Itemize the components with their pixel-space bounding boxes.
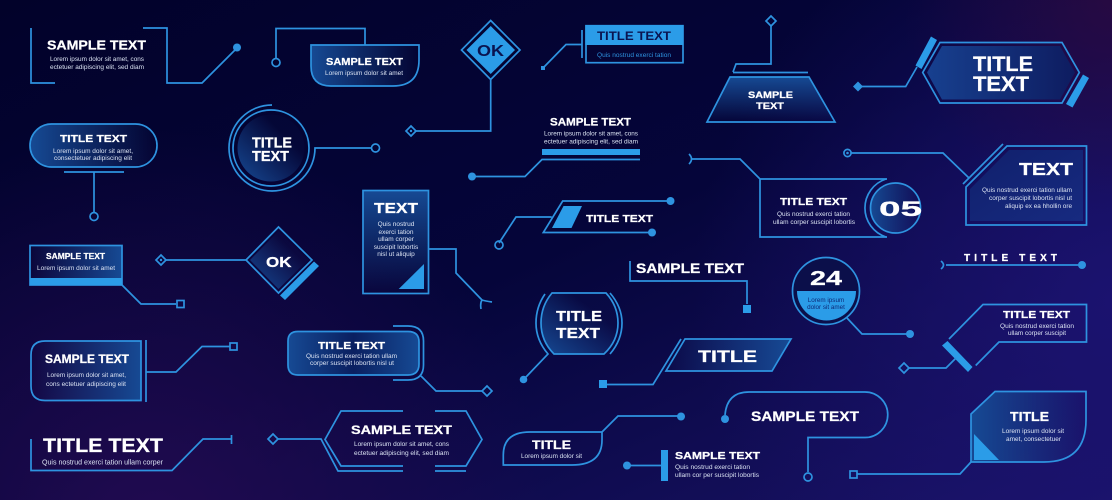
callout: title text clipped circle: TEXT <box>556 325 600 342</box>
callout: sample text rounded outline: SAMPLE TEXT <box>751 409 860 424</box>
callout: title text rounded rectangle <box>288 326 492 396</box>
callout: title text angled arm <box>899 304 1086 373</box>
callout: sample text with underline bar: Lorem ipsum dolor sit amet, cons <box>544 130 639 138</box>
callout: 24 circle badge <box>792 258 914 338</box>
callout: 24 circle badge: Lorem ipsum <box>808 297 844 304</box>
callout: title panel with triangle <box>850 392 1086 478</box>
callout: title small rounded box: Lorem ipsum dolor sit <box>521 453 582 460</box>
callout: title panel with triangle: Lorem ipsum dolor sit <box>1002 428 1064 435</box>
callout: title text parallelogram tag <box>495 197 674 249</box>
callout: title text rounded rectangle: TITLE TEXT <box>318 340 386 352</box>
callout: sample text left rounded panel <box>31 340 237 402</box>
callout: text panel with cut corner <box>844 144 1086 225</box>
callout: title text rounded rectangle: corper suscipit lobortis nisl ut <box>310 360 394 367</box>
callout: spaced title text line: TITLE TEXT <box>964 253 1057 264</box>
callout: title parallelogram: TITLE <box>698 348 757 366</box>
callout: title text clipped circle: TITLE <box>556 308 602 325</box>
callout: large title text bracket: Quis nostrud exerci tation ullam corper <box>42 460 164 466</box>
callout: sample text broken hexagon: ectetuer adipiscing elit, sed diam <box>354 450 449 457</box>
callout: sample text with underline bar: SAMPLE TEXT <box>550 116 631 128</box>
callout: sample text broken hexagon <box>268 411 482 471</box>
callout: tall text card: exerci tation <box>378 229 414 236</box>
callout: sample text box with blue base: Lorem ipsum dolor sit amet <box>37 265 115 272</box>
callout: numbered 05 panel <box>689 154 923 237</box>
callout: title parallelogram <box>599 339 791 388</box>
callout: title small rounded box: TITLE <box>532 438 571 452</box>
callout: tall text card: suscipit lobortis <box>374 244 419 251</box>
callout: title text hexagon with stripes <box>853 36 1089 108</box>
callout: title text angled arm: ullam corper suscipit <box>1008 330 1066 337</box>
callout: 24 circle badge: 24 <box>810 267 843 290</box>
callout: title text with blue header <box>541 25 683 70</box>
callout: sample text left rounded panel: SAMPLE TEXT <box>45 354 129 366</box>
callout: title text rounded rectangle: Quis nostrud exerci tation ullam <box>306 353 397 360</box>
callout: text panel with cut corner: corper suscipit lobortis nisl ut <box>989 195 1072 202</box>
callout: sample text left rounded panel: Lorem ipsum dolor sit amet, <box>47 372 126 379</box>
callout: sample text bracket top left <box>31 28 241 83</box>
callout: sample text broken hexagon: SAMPLE TEXT <box>351 423 453 437</box>
callout: numbered 05 panel: 05 <box>879 198 923 221</box>
callout: sample text left rounded panel: cons ectetuer adipiscing elit <box>46 381 126 388</box>
callout: sample text with blue vertical bar <box>623 450 761 481</box>
callout: sample text with underline bar: ectetuer adipiscing elit, sed diam <box>544 138 638 146</box>
callout: sample text bracket top left: Lorem ipsum dolor sit amet, cons <box>50 56 145 63</box>
callout: title text hexagon with stripes: TITLE <box>973 53 1033 76</box>
callout: numbered 05 panel: ullam corper suscipit lobortis <box>773 219 856 226</box>
callout: sample text with blue vertical bar: ullam cor per suscipit lobortis <box>675 472 760 479</box>
callout: title text circle: TITLE <box>252 136 292 152</box>
callout: sample text rounded bottom box: Lorem ipsum dolor sit amet <box>325 70 403 77</box>
callout: OK blue diamond: OK <box>477 43 505 60</box>
callout: numbered 05 panel: TITLE TEXT <box>780 196 848 208</box>
callout: large title text bracket: TITLE TEXT <box>43 436 163 457</box>
callout: title panel with triangle: amet, consectetuer <box>1006 436 1062 443</box>
callout: sample text bracket center: SAMPLE TEXT <box>636 261 745 276</box>
callout: title text circle <box>229 105 380 191</box>
callout: title panel with triangle: TITLE <box>1010 409 1049 424</box>
callout: numbered 05 panel: Quis nostrud exerci tation <box>777 211 850 218</box>
callout: sample text broken hexagon: Lorem ipsum dolor sit amet, cons <box>354 441 450 448</box>
callout: OK dark diamond: OK <box>266 254 292 271</box>
callout: sample text bracket center <box>630 261 751 313</box>
callout: sample text trapezoid <box>707 16 835 122</box>
callout: sample text trapezoid: SAMPLE <box>748 90 793 101</box>
callout: title text clipped circle <box>520 293 622 383</box>
callout: title text pill: Lorem ipsum dolor sit amet, <box>53 148 133 155</box>
callout: sample text box with blue base: SAMPLE TEXT <box>46 251 106 261</box>
callout: OK dark diamond <box>156 227 319 300</box>
callout: title text hexagon with stripes: TEXT <box>973 73 1029 96</box>
callout: sample text rounded outline <box>721 392 888 481</box>
callout: sample text with underline bar <box>468 116 640 180</box>
callout: text panel with cut corner: aliquip ex ea hhollin ore <box>1005 203 1072 210</box>
callout: title text angled arm: TITLE TEXT <box>1003 309 1071 321</box>
callout: tall text card <box>363 190 492 309</box>
callout: sample text bracket top left: ectetuer adipiscing elit, sed diam <box>50 64 144 71</box>
callout: sample text rounded bottom box: SAMPLE TEXT <box>326 56 404 68</box>
callout: sample text with blue vertical bar: SAMPLE TEXT <box>675 450 761 462</box>
callout: title text with blue header: TITLE TEXT <box>597 29 672 43</box>
callout: title text parallelogram tag: TITLE TEXT <box>586 213 654 225</box>
callout: sample text trapezoid: TEXT <box>756 101 784 112</box>
callout: spaced title text line <box>941 253 1086 269</box>
callout: title text pill: consectetuer adipiscing elit <box>54 155 132 162</box>
callout: text panel with cut corner: Quis nostrud exerci tation ullam <box>982 187 1072 194</box>
callout: sample text bracket top left: SAMPLE TEXT <box>47 38 146 52</box>
callout: tall text card: ullam corper <box>378 236 415 243</box>
callout: title text pill: TITLE TEXT <box>60 133 128 145</box>
callout: tall text card: nisl ut aliquip <box>377 251 415 258</box>
callout: title text pill <box>30 124 157 220</box>
callout: tall text card: TEXT <box>374 201 418 217</box>
callout: sample text rounded bottom box <box>272 28 419 86</box>
callout: text panel with cut corner: TEXT <box>1019 159 1073 179</box>
callout: title small rounded box <box>503 412 685 465</box>
callout: 24 circle badge: dolor sit amet <box>807 304 845 311</box>
callout: large title text bracket <box>31 435 232 470</box>
callout: title text with blue header: Quis nostrud exerci tation <box>597 52 671 59</box>
callout: sample text with blue vertical bar: Quis nostrud exerci tation <box>675 464 750 471</box>
callout: sample text box with blue base <box>30 246 184 308</box>
callout: OK blue diamond <box>406 20 520 136</box>
callout: title text angled arm: Quis nostrud exerci tation <box>1000 323 1074 330</box>
callout: title text circle: TEXT <box>252 149 289 165</box>
callout: tall text card: Quis nostrud <box>378 221 415 228</box>
